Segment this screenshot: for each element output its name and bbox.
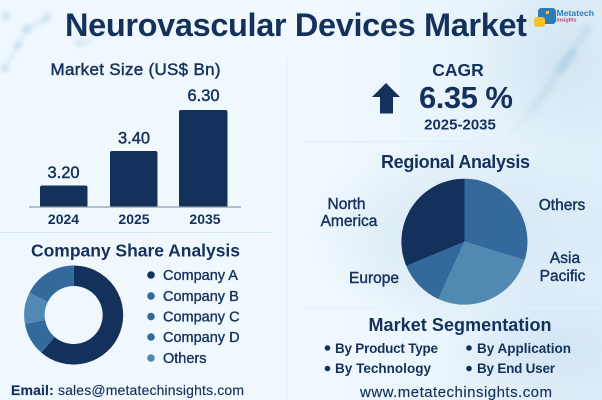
segment list: By Product Type <box>335 341 438 356</box>
label: Asia Pacific: Asia <box>550 250 580 267</box>
bar: 2025 <box>110 130 158 227</box>
segment list: By Application <box>477 341 571 356</box>
segment list: By Technology <box>335 361 431 376</box>
panel: market segmentation <box>325 315 571 376</box>
label: Europe: Europe <box>349 270 399 287</box>
bar: 2025: 2025 <box>118 211 150 227</box>
label: North America: America <box>321 213 378 230</box>
icon: Metatech Insights logo: Metatech <box>556 9 594 18</box>
heading: market segmentation: Market Segmentation <box>368 315 552 335</box>
panel: CAGR <box>372 60 513 134</box>
heading: company share: Company Share Analysis <box>31 240 240 260</box>
heading: market size: Market Size (US$ Bn) <box>50 60 220 79</box>
label: Asia Pacific: Pacific <box>540 268 586 285</box>
legend: Others <box>163 351 207 367</box>
heading: regional analysis: Regional Analysis <box>381 152 530 172</box>
heading: CAGR: CAGR <box>432 60 484 80</box>
contact email: Email: sales@metatechinsights.com <box>11 382 244 398</box>
pie chart <box>401 179 527 305</box>
bar: 2024 <box>40 164 88 227</box>
segment list: By End User <box>477 361 556 376</box>
bar: 2035: 6.30 <box>187 87 220 105</box>
legend: Company C <box>163 310 240 326</box>
bar: 2024: 2024 <box>48 211 79 227</box>
legend: Company B <box>163 289 239 305</box>
donut chart <box>34 276 113 354</box>
icon: Metatech Insights logo: Insights <box>556 18 577 24</box>
legend <box>147 268 240 367</box>
CAGR value: 6.35 % <box>419 80 513 115</box>
icon: Metatech Insights logo <box>534 8 594 27</box>
bar: 2025: 3.40 <box>118 130 150 148</box>
panel: company share analysis <box>31 240 240 367</box>
bar: 2035: 2035 <box>189 211 221 227</box>
bar: 2024: 3.20 <box>47 164 80 182</box>
label: Others: Others <box>539 197 586 214</box>
title: Neurovascular Devices Market <box>65 7 527 43</box>
icon: up arrow <box>372 83 400 114</box>
legend: Company D <box>163 330 240 346</box>
panel: regional analysis <box>321 152 586 305</box>
legend: Company A <box>163 268 238 284</box>
label: North America: North <box>328 196 365 213</box>
CAGR period: 2025-2035 <box>424 116 496 134</box>
bar: 2035 <box>179 87 228 227</box>
segment list <box>325 341 571 376</box>
panel: market size bar chart <box>29 60 241 227</box>
